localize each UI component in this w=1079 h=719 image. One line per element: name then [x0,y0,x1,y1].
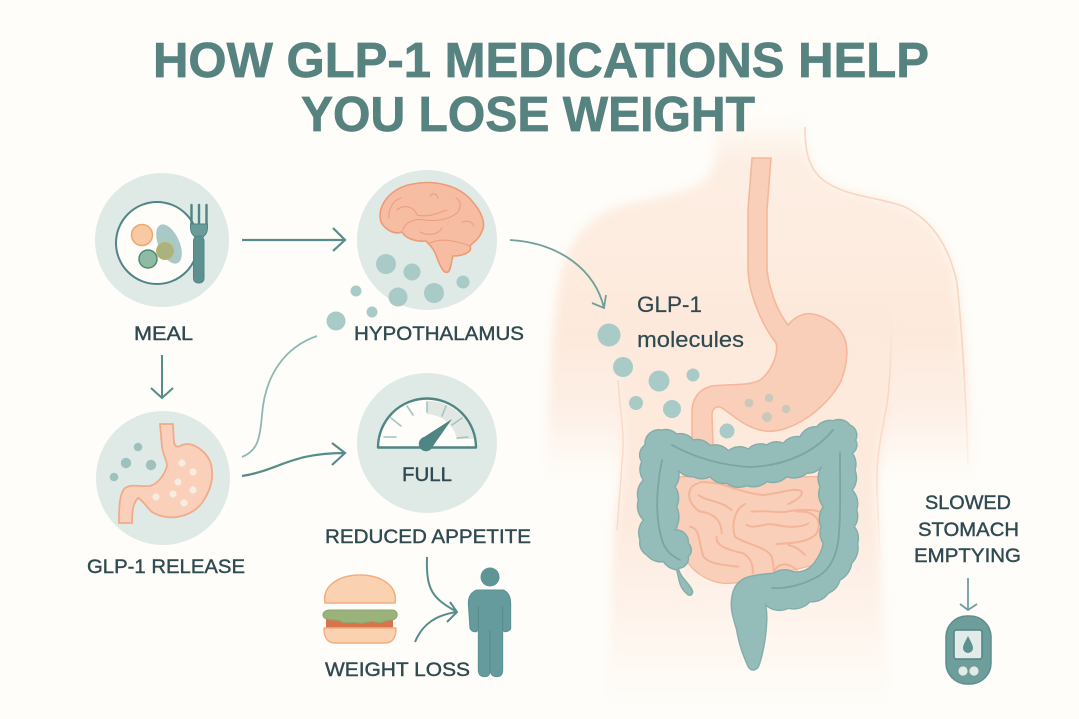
label: weight loss: WEIGHT LOSS [325,660,470,681]
label: GLP-1 release: GLP-1 RELEASE [87,557,245,578]
GLP-1 molecules label [637,292,744,352]
panel: meal [95,173,229,345]
GLP-1 molecules in body [598,324,734,438]
title: HOW GLP-1 MEDICATIONS HELP [153,34,929,88]
arrow: release to fullness [242,443,345,476]
panel: body illustration [546,118,974,705]
label: slowed stomach emptying [914,493,1021,567]
oesophagus and stomach [692,158,847,445]
icon: glucose monitor device [946,616,991,684]
body silhouette [546,118,974,705]
right inner arm line [877,313,892,560]
panel: hypothalamus [326,170,524,345]
small intestine [675,477,823,583]
icon: burger [323,575,397,643]
label: slowed stomach emptying: STOMACH [918,520,1019,541]
GLP-1 dots near brain [326,254,470,330]
icon: person [468,568,511,677]
meal circle [95,173,229,307]
left inner arm line [617,380,623,530]
arrow: hypothalamus to body [510,240,606,308]
arrow: meal to release [151,355,173,398]
large intestine [637,420,858,670]
dots inside stomach [152,459,197,507]
label: hypothalamus: HYPOTHALAMUS [354,324,524,345]
gauge circle [357,373,497,513]
arrow: meal to hypothalamus [242,228,345,251]
title [153,34,929,142]
GLP-1 molecules label: GLP-1 [637,292,702,317]
icon: stomach [119,424,212,523]
label: slowed stomach emptying: SLOWED [925,493,1011,514]
arrow: release to hypothalamus [242,336,317,457]
title: YOU LOSE WEIGHT [301,88,755,142]
arrow: appetite to weight loss [427,557,457,622]
hypothalamus circle [357,170,497,310]
label: slowed stomach emptying: EMPTYING [914,546,1021,567]
label: full: FULL [402,465,452,486]
arrow: burger to person [415,612,457,642]
label: meal: MEAL [134,324,193,345]
right shoulder outline [805,127,968,465]
icon: fork [190,205,208,283]
GLP-1 molecules label: molecules [637,327,744,352]
panel: fullness gauge [357,373,497,513]
stomach molecules [744,394,790,422]
release circle [96,411,230,545]
icon: gauge [378,398,476,451]
arrow: to device [960,578,977,610]
label: reduced appetite: REDUCED APPETITE [325,527,531,548]
dots outside stomach [110,443,156,481]
icon: plate with food [116,202,198,284]
panel: GLP-1 release [87,411,245,578]
icon: brain [380,183,484,272]
